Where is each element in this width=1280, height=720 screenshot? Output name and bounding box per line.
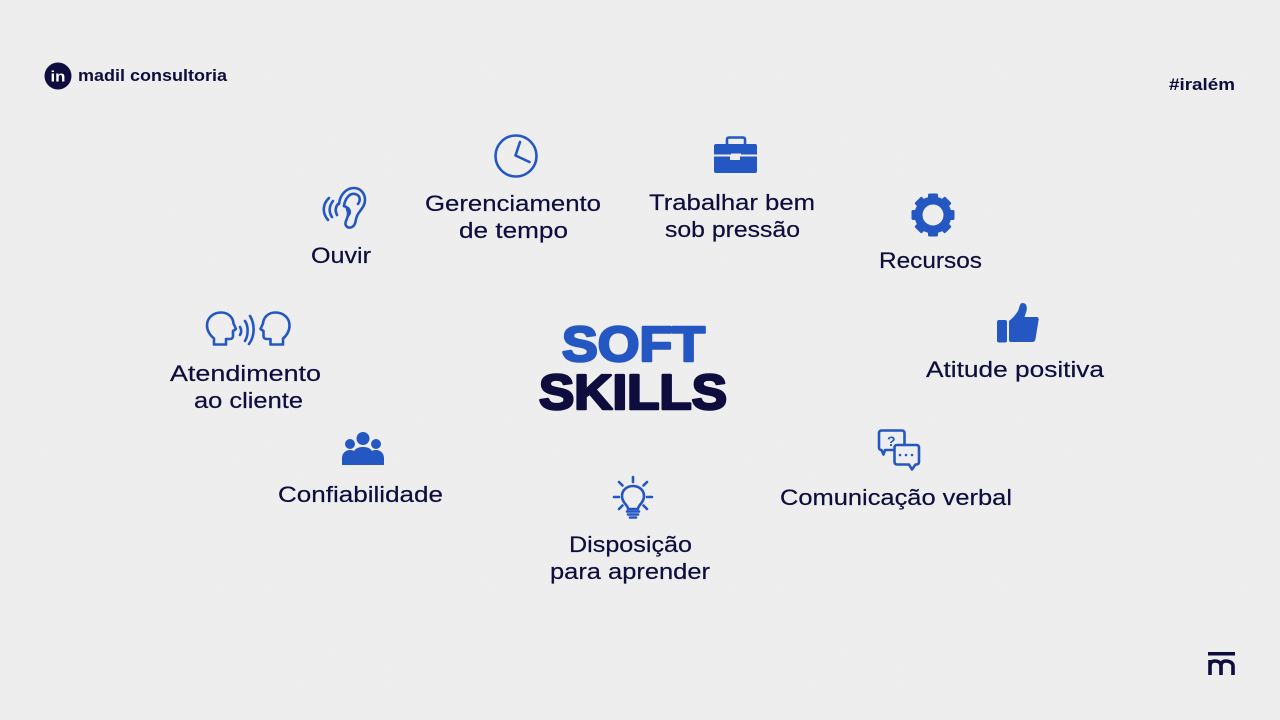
skill: recursos — [879, 194, 982, 273]
icon: thumbs up — [997, 303, 1039, 342]
logo: madil consultoria: in — [50, 68, 66, 86]
title: soft skills: SOFT — [562, 318, 705, 372]
skill: disposição para aprender: para aprender — [550, 559, 711, 584]
skill: atitude positiva — [926, 303, 1105, 382]
skill: confiabilidade — [278, 432, 443, 507]
icon: two heads talking — [207, 312, 290, 344]
logo: madil consultoria: madil consultoria — [78, 67, 228, 85]
skill: trabalhar bem sob pressão — [649, 138, 815, 242]
skill: disposição para aprender: Disposição — [569, 532, 692, 557]
hashtag: #iralém — [1169, 76, 1235, 94]
skill: gerenciamento de tempo: Gerenciamento — [425, 191, 601, 216]
icon: gear — [912, 194, 954, 236]
logo mark: m — [1208, 652, 1235, 675]
skill: atendimento ao cliente — [170, 312, 321, 413]
skill: atitude positiva: Atitude positiva — [926, 357, 1105, 382]
skill: gerenciamento de tempo: de tempo — [459, 218, 568, 243]
skill: gerenciamento de tempo — [425, 136, 601, 243]
skill: confiabilidade: Confiabilidade — [278, 482, 443, 507]
icon: clock — [496, 136, 536, 176]
skill: ouvir — [311, 188, 372, 268]
skill: ouvir: Ouvir — [311, 243, 372, 268]
skill: atendimento ao cliente: Atendimento — [170, 361, 321, 386]
skill: trabalhar bem sob pressão: sob pressão — [665, 217, 800, 242]
title: soft skills — [539, 318, 727, 420]
title: soft skills: SKILLS — [539, 366, 727, 420]
skill: trabalhar bem sob pressão: Trabalhar bem — [649, 190, 815, 215]
skill: disposição para aprender — [550, 477, 711, 584]
skill: comunicação verbal — [780, 430, 1012, 510]
icon: briefcase — [714, 138, 757, 173]
icon: group of people — [342, 432, 384, 465]
skill: recursos: Recursos — [879, 248, 982, 273]
skill: atendimento ao cliente: ao cliente — [194, 388, 303, 413]
icon: chat bubbles — [879, 430, 919, 470]
skill: comunicação verbal: Comunicação verbal — [780, 485, 1012, 510]
icon: ear — [324, 188, 365, 228]
logo: madil consultoria — [44, 62, 228, 90]
icon: light bulb — [614, 477, 652, 518]
icon: chat bubbles: ? — [887, 433, 896, 449]
